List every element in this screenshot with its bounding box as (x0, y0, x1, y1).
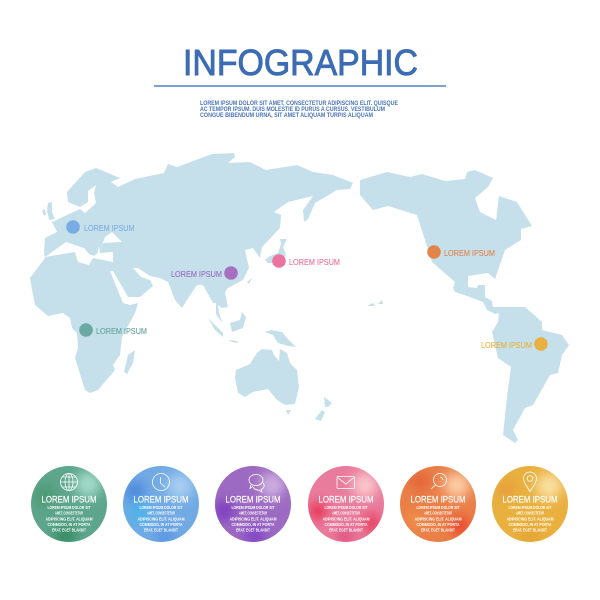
body text: COMMODO, IN AT PORTA (324, 522, 368, 527)
icon: clock (152, 474, 170, 490)
map pin: North America (427, 245, 495, 259)
body text: LOREM IPSUM DOLOR SIT (416, 505, 460, 510)
body text: ADIPISCING ELIT. ALIQUAM (46, 516, 93, 522)
body text: COMMODO, IN AT PORTA (508, 522, 552, 527)
land: New Zealand north (324, 397, 332, 407)
land: Ireland (42, 209, 46, 216)
subtitle text block: CONGUE BIBENDUM URNA, SIT AMET ALIQUAM TURPIS ALIQUAM (200, 112, 373, 119)
map pin: Europe (66, 220, 134, 234)
body text: ERAT, EGET BLANDIT (329, 528, 363, 532)
body text: ADIPISCING ELIT. ALIQUAM (230, 516, 277, 522)
panel: pink mail circle (308, 466, 384, 545)
land: Eurasia and Africa (30, 153, 353, 393)
body text: ERAT, EGET BLANDIT (52, 528, 86, 532)
body text (322, 505, 370, 532)
panel: yellow location circle (492, 466, 568, 546)
body text: COMMODO, IN AT PORTA (140, 522, 182, 527)
land: Borneo (230, 312, 246, 332)
land: Americas (360, 170, 569, 443)
land: Australia (235, 349, 299, 405)
sea: Black Sea (102, 232, 122, 245)
land: Japan (265, 239, 287, 263)
land: Madagascar (124, 350, 135, 374)
body text: LOREM IPSUM DOLOR SIT (140, 505, 183, 510)
heading: LOREM IPSUM (134, 494, 189, 506)
land: Java (228, 340, 238, 343)
body text: COMMODO, IN AT PORTA (48, 522, 90, 527)
subtitle text block (200, 100, 398, 119)
body text: ADIPISCING ELIT. ALIQUAM (506, 516, 554, 522)
title underline (154, 85, 446, 87)
heading: LOREM IPSUM (502, 494, 558, 506)
subtitle text block: LOREM IPSUM DOLOR SIT AMET, CONSECTETUR ADIPISCING ELIT. QUISQUE (200, 100, 398, 107)
map pin: Africa: LOREM IPSUM (96, 326, 147, 336)
heading: LOREM IPSUM (42, 494, 97, 506)
icon: speech bubbles (249, 474, 264, 492)
heading: LOREM IPSUM (226, 494, 281, 506)
body text: AMET, CONSECTETUR (239, 510, 268, 516)
sea: Mediterranean (45, 242, 113, 265)
icon: globe (60, 474, 78, 490)
icon: magnifier (431, 474, 446, 489)
body text (46, 505, 93, 532)
map pin: Japan: LOREM IPSUM (289, 257, 340, 267)
body text (506, 505, 554, 532)
title: INFOGRAPHIC (183, 42, 418, 83)
body text: ERAT, EGET BLANDIT (513, 528, 547, 532)
icon: location pin (524, 472, 536, 492)
subtitle text block: AC TEMPOR IPSUM. DUIS MOLESTIE ID PURUS A CURSUS. VESTIBULUM (200, 106, 385, 113)
body text (230, 505, 277, 532)
heading: LOREM IPSUM (318, 494, 374, 506)
map pin: Japan (272, 254, 340, 268)
map pin: South America: LOREM IPSUM (481, 340, 532, 350)
land: Sumatra (208, 318, 223, 337)
land: New Guinea (265, 330, 296, 347)
map pin: North America: LOREM IPSUM (444, 248, 495, 258)
body text: ADIPISCING ELIT. ALIQUAM (138, 516, 185, 522)
land: Pacific island west (367, 303, 375, 306)
body text (414, 505, 462, 532)
body text: ERAT, EGET BLANDIT (421, 528, 455, 532)
body text: COMMODO, IN AT PORTA (232, 522, 274, 527)
body text: AMET, CONSECTETUR (516, 510, 545, 516)
panel: orange search circle (400, 466, 476, 542)
land: Britain (47, 202, 55, 220)
panel: purple speech circle (214, 466, 291, 546)
land: Taiwan (247, 278, 252, 284)
heading: LOREM IPSUM (410, 494, 466, 506)
map pin: Europe: LOREM IPSUM (84, 223, 134, 233)
body text: COMMODO, IN AT PORTA (416, 522, 460, 527)
body text: ERAT, EGET BLANDIT (144, 528, 178, 532)
body text: LOREM IPSUM DOLOR SIT (508, 505, 552, 510)
body text: ADIPISCING ELIT. ALIQUAM (414, 516, 462, 522)
body text: LOREM IPSUM DOLOR SIT (232, 505, 275, 510)
body text: AMET, CONSECTETUR (424, 510, 453, 516)
panel: blue clock circle (123, 466, 199, 546)
map pin: China (171, 266, 238, 280)
body text: ADIPISCING ELIT. ALIQUAM (322, 516, 370, 522)
world map (30, 153, 569, 443)
body text: AMET, CONSECTETUR (147, 510, 176, 516)
map pin: South America (481, 337, 548, 351)
panel: green globe circle (31, 466, 107, 547)
land: Tasmania (286, 410, 291, 415)
body text: ERAT, EGET BLANDIT (236, 528, 270, 532)
land: New Zealand south (315, 410, 325, 421)
body text: LOREM IPSUM DOLOR SIT (324, 505, 368, 510)
body text: AMET, CONSECTETUR (55, 510, 84, 516)
body text: LOREM IPSUM DOLOR SIT (48, 505, 91, 510)
land: Pacific island east (378, 300, 383, 304)
body text (138, 505, 185, 532)
body text: AMET, CONSECTETUR (332, 510, 361, 516)
land: Italy (84, 240, 97, 256)
icon: envelope (337, 476, 354, 488)
map pin: China: LOREM IPSUM (171, 269, 222, 279)
map pin: Africa (79, 323, 147, 337)
